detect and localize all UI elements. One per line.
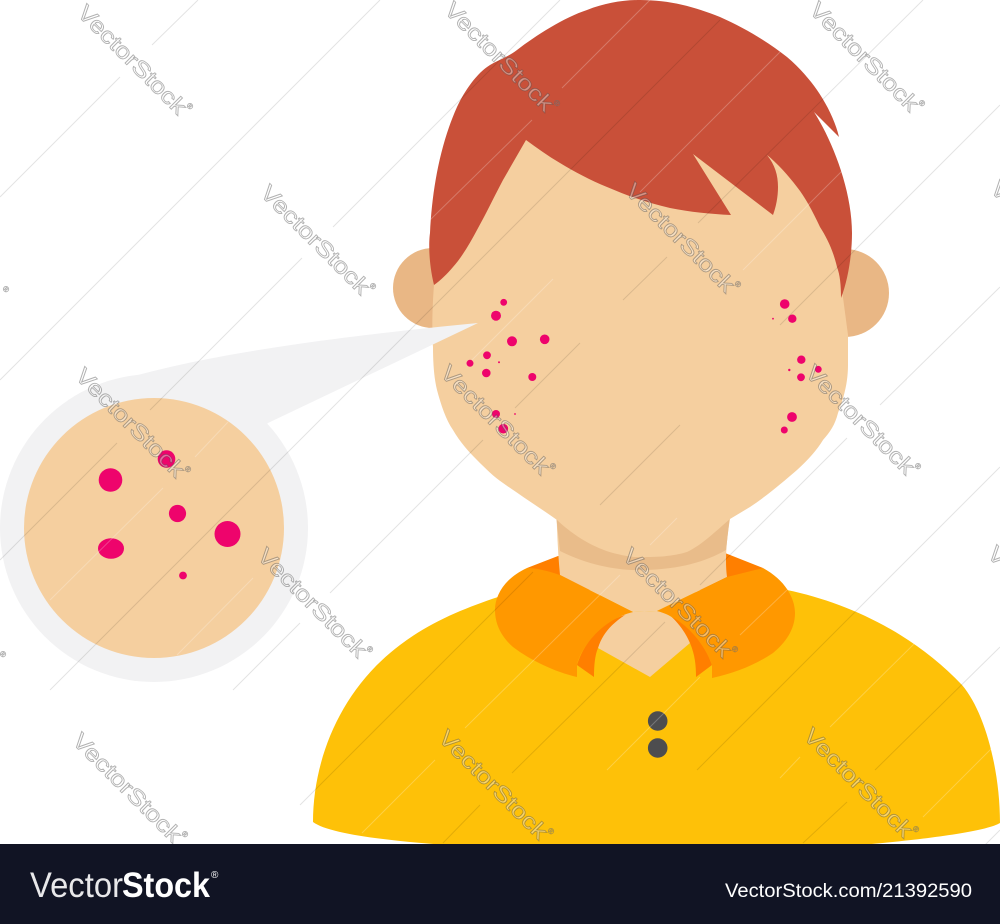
- acne spots left cheek: [466, 299, 550, 434]
- collar left: [495, 568, 633, 677]
- footer bar: Stock: [122, 866, 210, 905]
- watermarks: VectorStock: [435, 360, 556, 480]
- watermarks: ®: [911, 824, 921, 835]
- watermarks: VectorStock: [252, 543, 373, 663]
- watermarks: VectorStock: [67, 728, 188, 848]
- acne spots right cheek: [772, 299, 822, 434]
- chest skin opening: [598, 611, 690, 677]
- shirt buttons: [648, 711, 668, 758]
- magnified acne spots: [98, 450, 240, 579]
- footer bar: ®: [211, 870, 219, 881]
- footer logo: Vector: [30, 866, 123, 905]
- watermarks: ®: [368, 281, 378, 292]
- neck: [556, 500, 730, 612]
- person: [313, 0, 1000, 846]
- watermarks: ®: [1, 284, 11, 295]
- footer image id: VectorStock.com/21392590: [725, 881, 972, 902]
- face: [432, 80, 848, 557]
- watermarks: ®: [180, 829, 190, 840]
- watermarks: ®: [548, 461, 558, 472]
- collar right underside: [670, 615, 712, 677]
- watermarks: ®: [913, 461, 923, 472]
- watermarks: ®: [185, 101, 195, 112]
- watermarks: VectorStock: [617, 543, 738, 663]
- right ear: [801, 249, 889, 337]
- left ear: [393, 248, 473, 328]
- bubble pointer: [68, 323, 478, 528]
- watermarks: ®: [733, 279, 743, 290]
- collar left underside: [577, 615, 625, 677]
- watermarks: VectorStock: [72, 0, 193, 120]
- neck shadow: [556, 515, 730, 570]
- watermarks: ®: [552, 98, 562, 109]
- watermarks: VectorStock: [798, 723, 919, 843]
- watermarks: VectorStock: [800, 360, 921, 480]
- watermarks: VectorStock: [620, 178, 741, 298]
- watermarks: VectorStock: [433, 725, 554, 845]
- watermarks: ®: [917, 98, 927, 109]
- watermarks: ®: [546, 826, 556, 837]
- watermarks: ®: [365, 644, 375, 655]
- hair: [429, 0, 852, 298]
- watermarks: ®: [183, 464, 193, 475]
- watermarks: VectorStock: [70, 363, 191, 483]
- magnifier bubble: [0, 323, 478, 682]
- collar right: [657, 568, 795, 678]
- bubble halo: [0, 374, 308, 682]
- footer bar: [0, 844, 1000, 924]
- collar back: [527, 553, 763, 590]
- watermarks: VectorStock: [255, 180, 376, 300]
- shirt: [313, 590, 1000, 846]
- watermarks: ®: [730, 644, 740, 655]
- magnified skin: [24, 398, 284, 658]
